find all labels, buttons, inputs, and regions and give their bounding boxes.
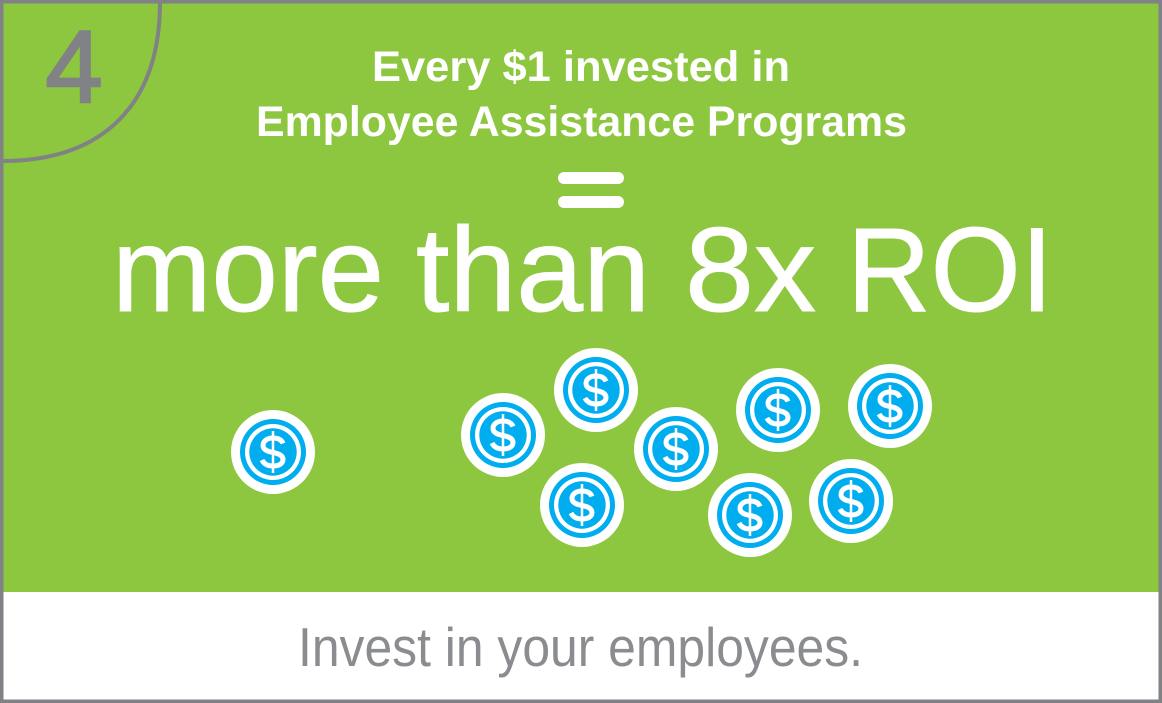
quarter circle number badge (2, 2, 160, 161)
white footer band (0, 592, 1162, 703)
main statistic: 8x (685, 203, 816, 337)
equals sign (558, 172, 624, 208)
heading (256, 43, 907, 146)
icons: eight dollar coins (461, 348, 932, 557)
main statistic: ROI (847, 203, 1053, 337)
main statistic: than (416, 203, 650, 337)
main statistic: more (112, 203, 384, 337)
icon: single dollar coin (231, 410, 315, 494)
footer tagline: Invest in your employees. (298, 616, 863, 678)
main statistic (112, 203, 1053, 337)
number 4: 4 (46, 10, 102, 124)
heading: Employee Assistance Programs (256, 98, 907, 146)
heading: Every $1 invested in (372, 43, 790, 91)
